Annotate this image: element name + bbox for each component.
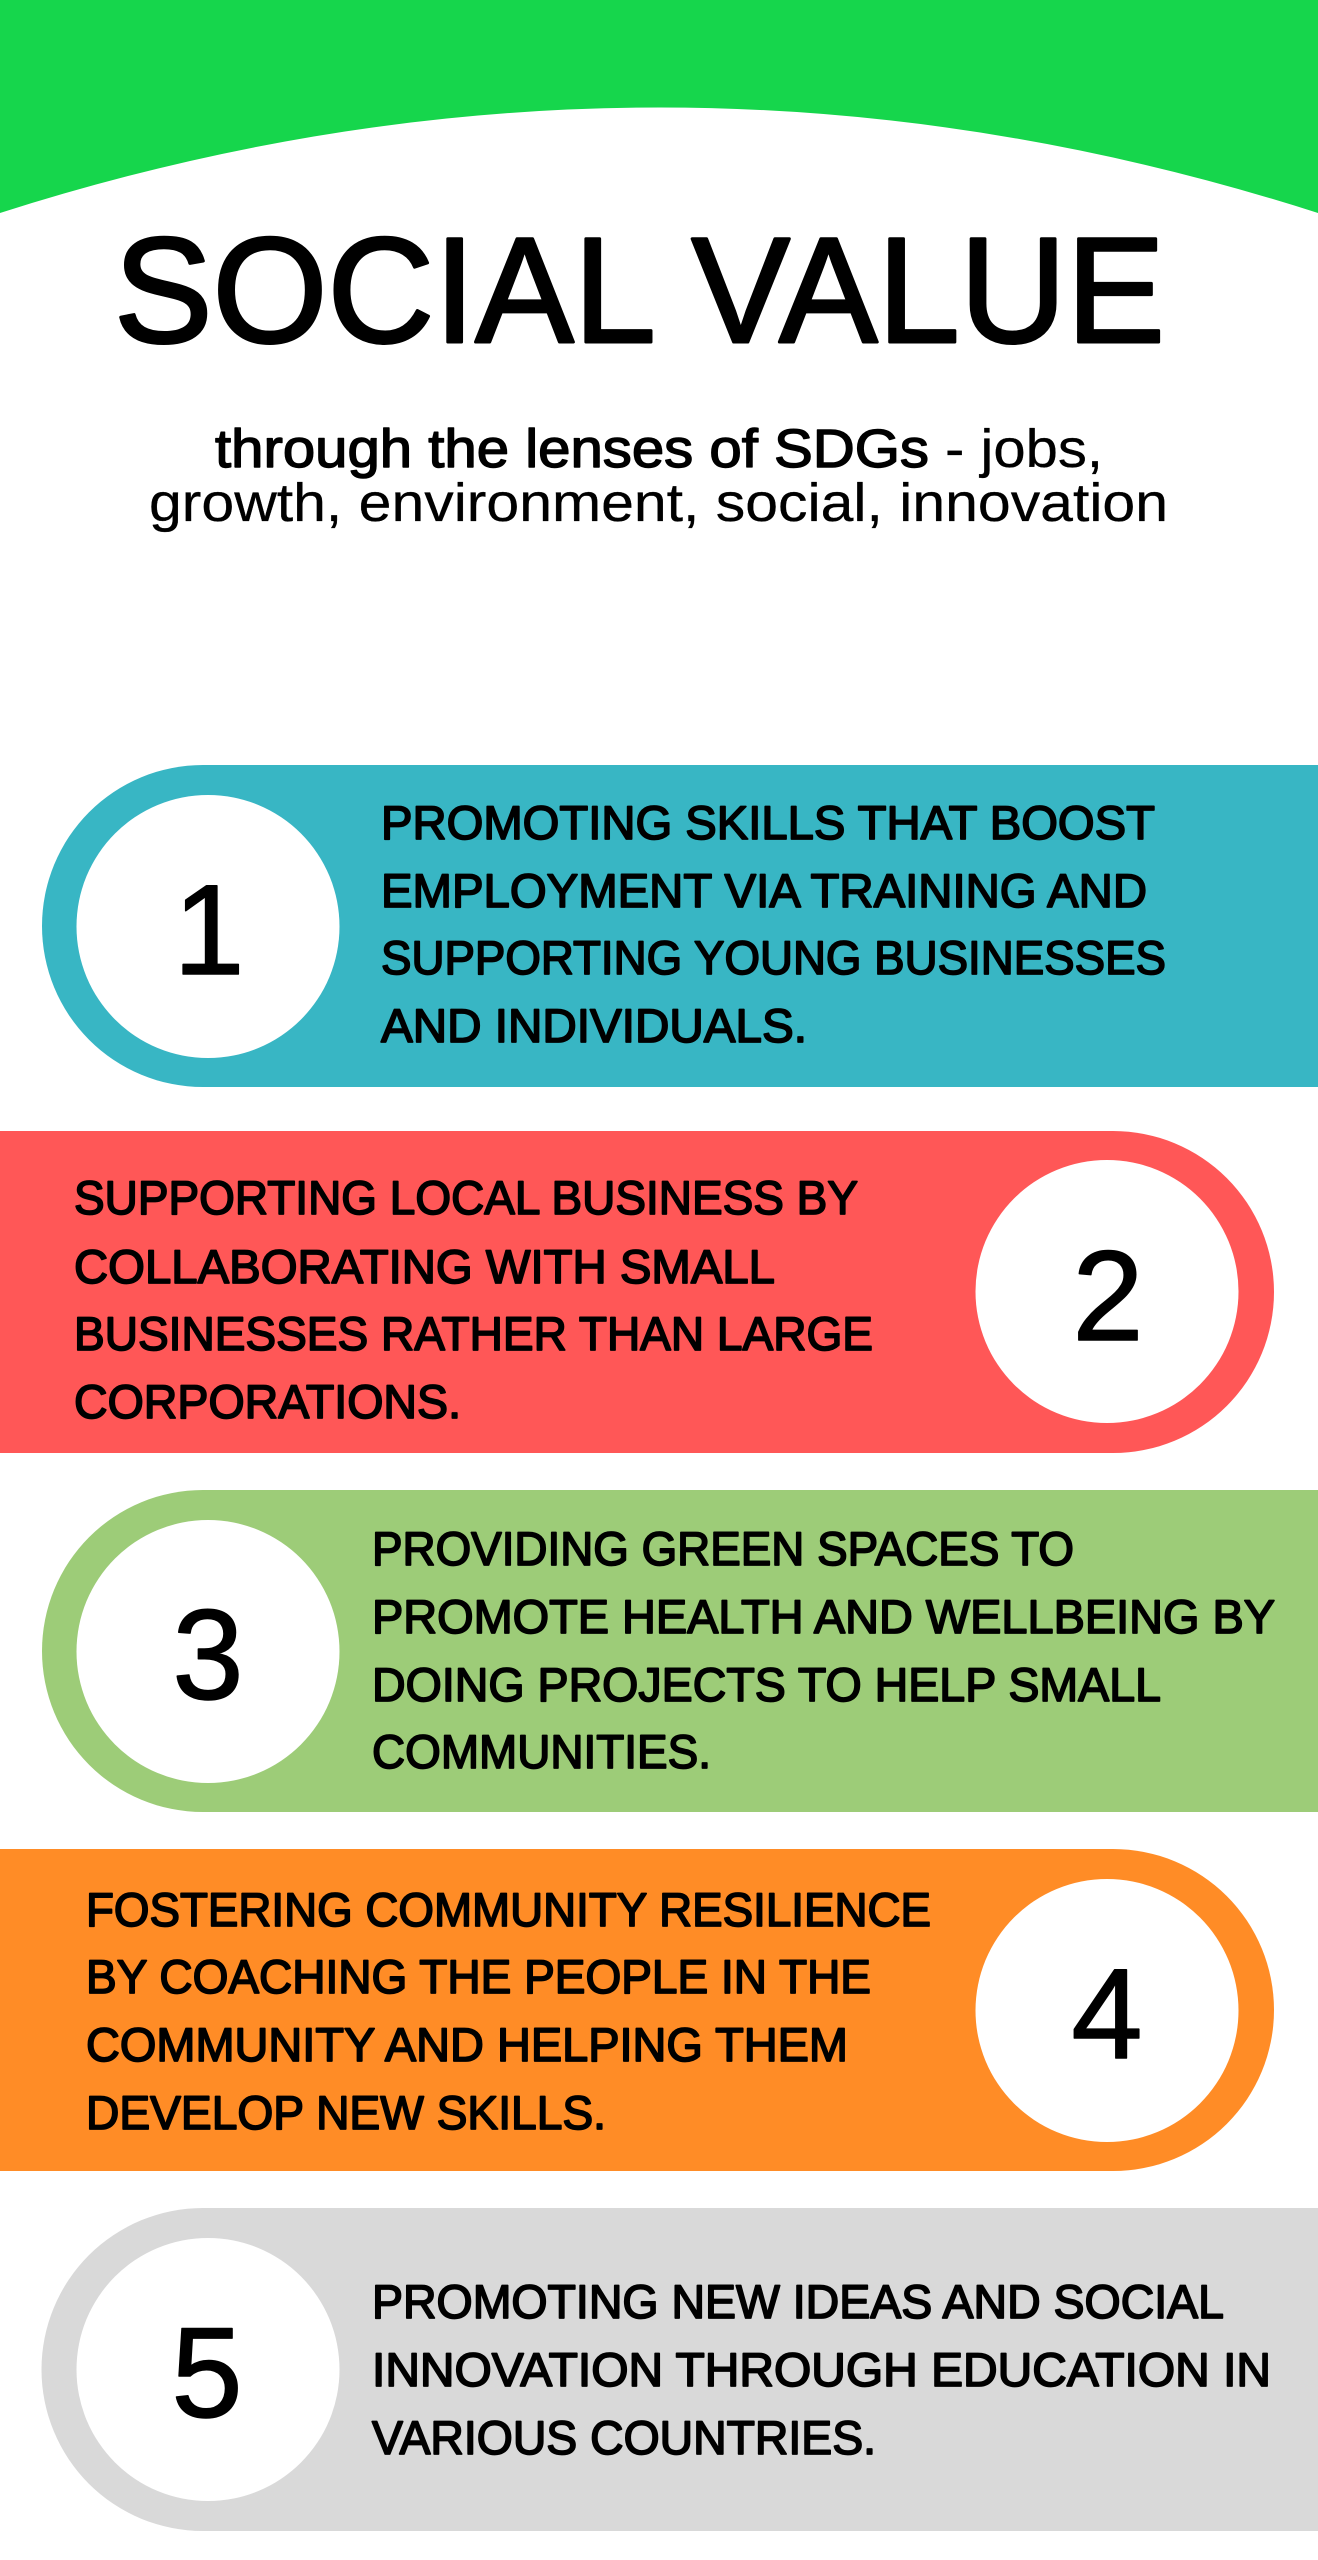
panel: item 5 — [41, 2208, 1318, 2531]
text block 3: PROMOTE HEALTH AND WELLBEING BY — [372, 1590, 1275, 1643]
text block 2: BUSINESSES RATHER THAN LARGE — [74, 1307, 873, 1360]
number 2: 2 — [1072, 1225, 1144, 1368]
number 5: 5 — [171, 2302, 243, 2445]
orange pill — [0, 1849, 1274, 2171]
text block 1: AND INDIVIDUALS. — [381, 999, 807, 1052]
number 3: 3 — [172, 1584, 244, 1727]
panel: item 4 — [0, 1849, 1274, 2171]
text block 1: PROMOTING SKILLS THAT BOOST — [381, 796, 1155, 849]
lime pill — [42, 1490, 1318, 1812]
text block 1 — [381, 796, 1166, 1052]
number 1: 1 — [173, 859, 245, 1002]
grey pill — [41, 2208, 1318, 2531]
text block 3: COMMUNITIES. — [372, 1725, 711, 1778]
text block 4: COMMUNITY AND HELPING THEM — [86, 2018, 848, 2071]
text block 2: SUPPORTING LOCAL BUSINESS BY — [74, 1171, 858, 1224]
text block 2: CORPORATIONS. — [74, 1375, 461, 1428]
text block 4: FOSTERING COMMUNITY RESILIENCE — [86, 1883, 931, 1936]
title: SOCIAL VALUE — [114, 206, 1165, 374]
text block 2 — [74, 1171, 873, 1428]
text block 3 — [372, 1522, 1275, 1778]
subtitle: - jobs, — [945, 419, 1103, 479]
text block 5: VARIOUS COUNTRIES. — [372, 2411, 876, 2464]
number circle 4 — [976, 1879, 1238, 2142]
panel: item 3 — [42, 1490, 1318, 1812]
number 4: 4 — [1071, 1943, 1143, 2086]
subtitle: growth, environment, social, innovation — [149, 473, 1168, 533]
panel: item 2 — [0, 1131, 1274, 1453]
number circle 1 — [76, 795, 340, 1058]
text block 2: COLLABORATING WITH SMALL — [74, 1240, 775, 1293]
text block 4 — [86, 1883, 931, 2139]
text block 4: BY COACHING THE PEOPLE IN THE — [86, 1950, 871, 2003]
text block 5: INNOVATION THROUGH EDUCATION IN — [372, 2343, 1271, 2396]
text block 3: PROVIDING GREEN SPACES TO — [372, 1522, 1074, 1575]
subtitle: through the lenses of SDGs — [215, 419, 929, 479]
number circle 2 — [976, 1160, 1238, 1423]
text block 1: SUPPORTING YOUNG BUSINESSES — [381, 931, 1166, 984]
panel: item 1 — [42, 765, 1318, 1087]
teal pill — [42, 765, 1318, 1087]
subtitle — [149, 419, 1168, 533]
number circle 3 — [76, 1520, 340, 1783]
red pill — [0, 1131, 1274, 1453]
number circle 5 — [76, 2238, 340, 2501]
text block 5: PROMOTING NEW IDEAS AND SOCIAL — [372, 2275, 1224, 2328]
text block 1: EMPLOYMENT VIA TRAINING AND — [381, 864, 1147, 917]
text block 3: DOING PROJECTS TO HELP SMALL — [372, 1658, 1161, 1711]
text block 5 — [372, 2275, 1271, 2464]
header: green arc banner — [0, 0, 1318, 213]
text block 4: DEVELOP NEW SKILLS. — [86, 2086, 606, 2139]
